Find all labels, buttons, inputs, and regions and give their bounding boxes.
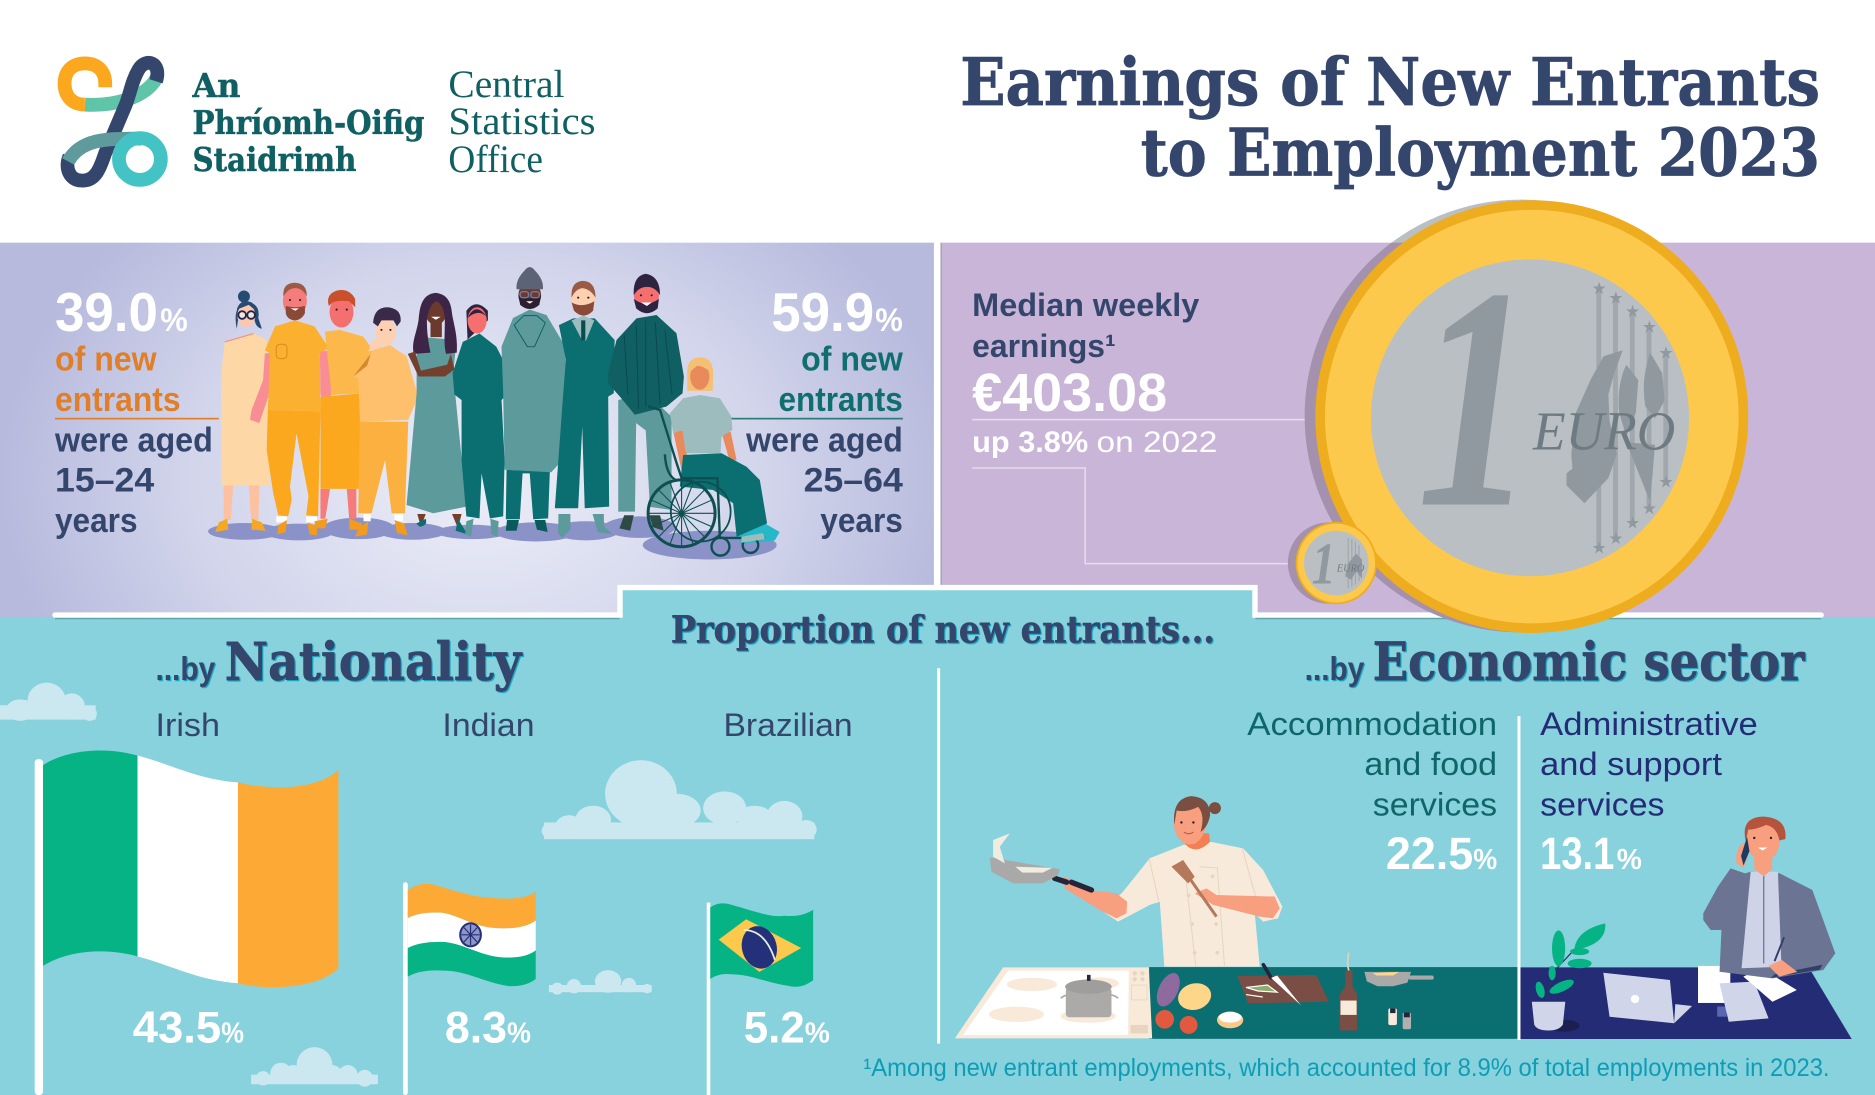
cloud: bottom: [251, 1047, 378, 1087]
person: man with grey beanie and long coat: [502, 267, 567, 532]
text: 59.9% aged 25-64: entrants: [778, 381, 903, 419]
ground shadows: [208, 516, 777, 559]
text: 59.9% aged 25-64: of new: [801, 341, 904, 379]
text: administrative and support services: [1540, 706, 1758, 879]
text: median weekly earnings: Median weekly: [972, 287, 1199, 323]
text: accommodation and food services: %: [1473, 844, 1497, 876]
labels: nationalities: Irish: [155, 707, 220, 743]
icon: large one euro coin: ★: [1659, 344, 1674, 363]
icon: large one euro coin: ★: [1608, 529, 1623, 548]
labels: nationalities: [155, 707, 853, 743]
shadow below outline: [55, 617, 1821, 619]
icon: large one euro coin: ★: [1608, 289, 1623, 308]
value: Irish share: %: [221, 1017, 244, 1049]
text: median weekly earnings: earnings¹: [972, 328, 1116, 364]
icon: large one euro coin: ★: [1642, 499, 1657, 518]
text: accommodation and food services: and food: [1364, 746, 1497, 782]
cloud: small by Indian flag: [549, 970, 652, 995]
divider between nationality and sector: [937, 668, 940, 1044]
icon: large one euro coin: ★: [1592, 279, 1607, 298]
illustration: kitchen counter: [955, 953, 1519, 1039]
coin stars and lines: [1596, 287, 1668, 548]
text: 39.0% aged 15-24: were aged: [54, 421, 213, 459]
cloud: top left: [0, 683, 97, 721]
person: man in orange t-shirt: [250, 283, 331, 536]
text: administrative and support services: 13.1: [1540, 828, 1614, 879]
footnote: ¹Among new entrant employments, which accounted for 8.9% of total employments in 2023.: [863, 1054, 1830, 1082]
stove: [955, 967, 1152, 1038]
text: 59.9% aged 25-64: years: [820, 502, 903, 540]
value: Brazilian share: %: [805, 1017, 830, 1049]
text: administrative and support services: %: [1617, 844, 1642, 876]
text: 59.9% aged 25-64: 59.9: [771, 281, 874, 343]
heading: by nationality: ...by: [155, 651, 216, 688]
logo text: English name: Office: [448, 137, 543, 181]
flag: Irish: [35, 751, 338, 1095]
text: median weekly earnings: €403.08: [972, 363, 1167, 423]
flag: Indian: [403, 882, 536, 1095]
labels: nationalities: Indian: [442, 707, 535, 743]
text: 39.0% aged 15-24: entrants: [55, 381, 181, 419]
icon: large one euro coin: ★: [1625, 302, 1640, 321]
icon: large one euro coin: ★: [1642, 317, 1657, 336]
text: 59.9% aged 25-64: [729, 281, 904, 540]
illustration: group of people: [208, 267, 780, 559]
labels: nationalities: Brazilian: [723, 707, 853, 743]
text: 59.9% aged 25-64: were aged: [745, 421, 903, 459]
text: 39.0% aged 15-24: 15–24: [55, 461, 155, 499]
logo text: Irish name: Staidrimh: [193, 140, 356, 179]
icon: small one euro coin: [1288, 522, 1377, 604]
text: median weekly earnings: up 3.8%: [972, 426, 1088, 459]
person: man in dark teal suit: [555, 281, 615, 538]
text: median weekly earnings: on 2022: [1097, 426, 1217, 459]
text: administrative and support services: Administrative: [1540, 706, 1758, 742]
icon: large one euro coin: ★: [1659, 473, 1674, 492]
title: [960, 43, 1820, 192]
icon: small one euro coin: EURO: [1336, 562, 1365, 574]
logo text: English name: [448, 62, 596, 181]
text: accommodation and food services: Accommodation: [1247, 706, 1497, 742]
text: 59.9% aged 25-64: 25–64: [804, 461, 904, 499]
icon: large one euro coin: [1305, 200, 1748, 633]
laptop: [1603, 973, 1692, 1023]
divider outline of proportion tab: [55, 588, 1821, 615]
logo text: Irish name: An: [192, 66, 240, 105]
text: administrative and support services: and support: [1540, 746, 1722, 782]
person: woman in wheelchair: [648, 357, 780, 556]
value: Irish share: 43.5: [133, 1003, 221, 1052]
logo: Central Statistics Office: [65, 62, 596, 181]
text: 39.0% aged 15-24: [54, 281, 219, 540]
logo text: Irish name: [192, 66, 425, 179]
value: Brazilian share: 5.2: [744, 1003, 805, 1052]
office worker: [1703, 816, 1835, 978]
person: woman in teal dress: [407, 293, 468, 534]
heading: by nationality: Nationality: [225, 632, 523, 693]
heading: proportion of new entrants: Proportion of new entrants...: [671, 608, 1215, 652]
text: accommodation and food services: services: [1373, 786, 1497, 822]
text: median weekly earnings: [972, 287, 1217, 459]
person: woman in dark teal: [453, 304, 512, 537]
icon: large one euro coin: EURO: [1532, 400, 1675, 461]
logo text: English name: Statistics: [448, 99, 596, 143]
text: 39.0% aged 15-24: %: [160, 302, 188, 338]
potted plant: [1532, 923, 1605, 1032]
heading: by economic sector: ...by: [1305, 651, 1365, 688]
vegetables and utensils: [1152, 953, 1434, 1034]
coin map of Europe: [1566, 350, 1665, 503]
thin rule at panel edge: [940, 243, 942, 587]
text: accommodation and food services: [1247, 706, 1497, 879]
icon: large one euro coin: ★: [1592, 538, 1607, 557]
text: administrative and support services: services: [1540, 786, 1665, 822]
text: 59.9% aged 25-64: %: [875, 302, 903, 338]
papers and notebook: [1698, 966, 1797, 1022]
heading: by economic sector: Economic sector: [1373, 632, 1806, 693]
panel: proportion of new entrants background: [0, 587, 1875, 1095]
logo text: English name: Central: [448, 62, 564, 106]
panel: age groups background: [0, 243, 934, 619]
person: man with red hair: [314, 290, 373, 530]
text: 39.0% aged 15-24: years: [55, 502, 138, 540]
logo text: Irish name: Phríomh-Oifig: [193, 103, 425, 142]
text: accommodation and food services: 22.5: [1386, 828, 1473, 879]
person: man in dark green jacket: [608, 274, 684, 531]
value: Indian share: 8.3: [445, 1003, 507, 1052]
connector lines to coins: [972, 420, 1315, 564]
person: woman in peach dress: [215, 290, 270, 532]
panel: median earnings background: [942, 243, 1875, 619]
flag: Brazilian: [707, 903, 813, 1095]
icon: large one euro coin: 1: [1417, 223, 1534, 573]
illustration: office desk and worker: [1517, 716, 1852, 1040]
person: boy in light orange sweater: [353, 307, 418, 537]
text: 39.0% aged 15-24: 39.0: [55, 281, 158, 343]
divider in counter: [1517, 716, 1520, 1040]
icon: large one euro coin: ★: [1625, 513, 1640, 532]
cloud: large: [542, 760, 817, 839]
icon: small one euro coin: 1: [1312, 530, 1336, 596]
value: Indian share: %: [507, 1017, 531, 1049]
illustration: chef: [990, 796, 1282, 967]
icon: logo knot mark: [65, 63, 161, 181]
text: 39.0% aged 15-24: of new: [55, 341, 158, 379]
